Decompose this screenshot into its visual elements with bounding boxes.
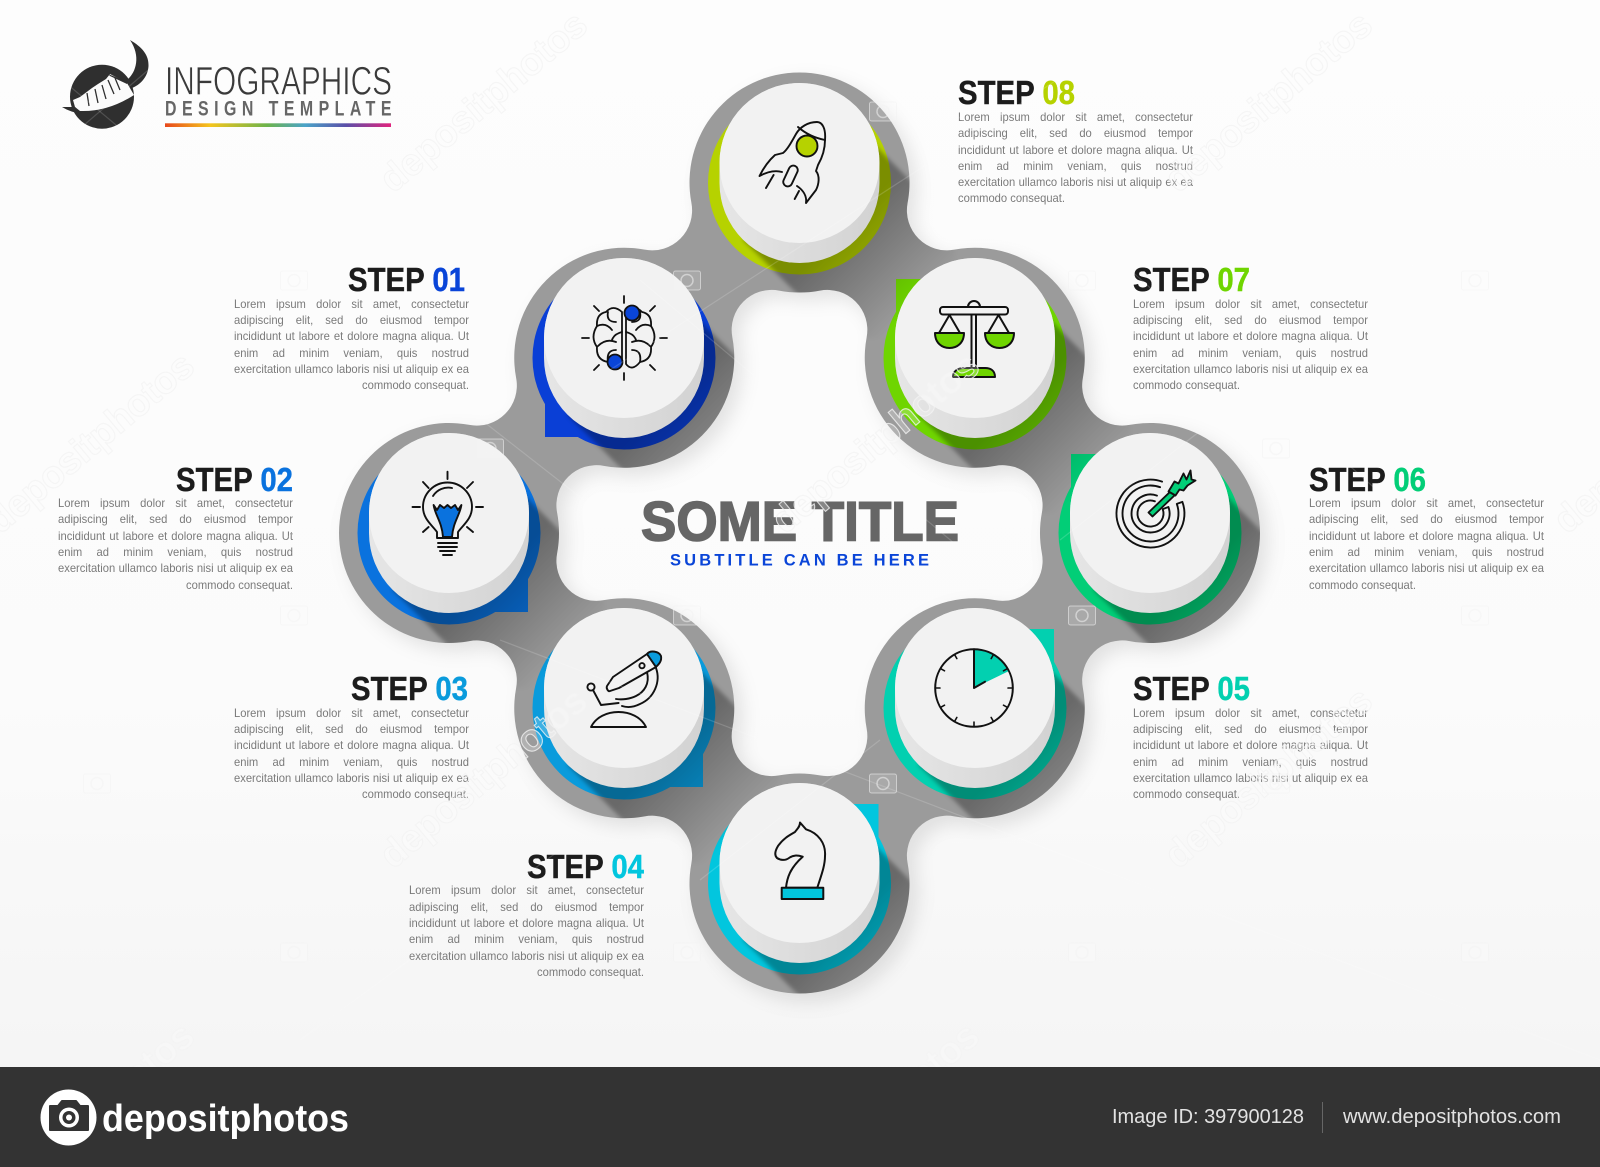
icon: brain: [582, 296, 667, 380]
text block: step 02: STEP 02: [176, 461, 293, 498]
text block: step 03: Lorem ipsum dolor sit amet, consectetur: [234, 706, 469, 720]
footer url: www.depositphotos.com: [1342, 1106, 1561, 1128]
text block: step 02: adipiscing elit, sed do eiusmod tempor: [58, 512, 293, 526]
text block: step 05: Lorem ipsum dolor sit amet, consectetur: [1133, 706, 1368, 720]
text block: step 04: adipiscing elit, sed do eiusmod tempor: [409, 900, 644, 914]
logo wordmark: INFOGRAPHICS: [165, 59, 392, 103]
text block: step 02: enim ad minim veniam, quis nostrud: [58, 545, 293, 559]
text block: step 05: exercitation ullamco laboris nisi ut aliquip ex ea: [1133, 771, 1368, 785]
coloured discs with square corners: [358, 92, 1242, 974]
text block: step 06: STEP 06: [1309, 461, 1426, 498]
text block: step 08: adipiscing elit, sed do eiusmod tempor: [958, 126, 1193, 140]
watermark overlay: depositphotos: [1157, 680, 1381, 877]
footer brand name: depositphotos: [102, 1098, 349, 1140]
text block: step 04: Lorem ipsum dolor sit amet, consectetur: [409, 883, 644, 897]
text block: step 06: commodo consequat.: [1309, 578, 1416, 592]
text block: step 04: enim ad minim veniam, quis nostrud: [409, 932, 644, 946]
text block: step 02: [58, 433, 527, 613]
text block: step 08: STEP 08: [958, 74, 1075, 111]
diagram: gray ring with step buttons: [62, 40, 1272, 1005]
text block: step 04: [409, 848, 644, 979]
text block: step 06: Lorem ipsum dolor sit amet, consectetur: [1309, 496, 1544, 510]
text block: step 03: STEP 03: [351, 670, 468, 707]
icon: scales: [935, 301, 1014, 377]
text block: step 01: enim ad minim veniam, quis nostrud: [234, 346, 469, 360]
text block: step 02: incididunt ut labore et dolore magna aliqua. Ut: [58, 529, 293, 543]
gray ring: [339, 73, 1260, 993]
icon: rocket: [760, 122, 825, 203]
text block: step 08: Lorem ipsum dolor sit amet, consectetur: [958, 110, 1193, 124]
icon: light bulb: [412, 472, 483, 555]
text block: step 03: adipiscing elit, sed do eiusmod tempor: [234, 722, 469, 736]
icon: clock: [935, 649, 1013, 727]
soft shadow under ring: [347, 81, 1268, 1001]
text block: step 07: adipiscing elit, sed do eiusmod tempor: [1133, 313, 1368, 327]
text block: step 05: incididunt ut labore et dolore magna aliqua. Ut: [1133, 738, 1368, 752]
text block: step 01: adipiscing elit, sed do eiusmod tempor: [234, 313, 469, 327]
text block: step 08: [958, 74, 1193, 205]
button 05: [895, 608, 1055, 788]
text block: step 05: adipiscing elit, sed do eiusmod tempor: [1133, 722, 1368, 736]
text block: step 08: incididunt ut labore et dolore magna aliqua. Ut: [958, 143, 1193, 157]
text block: step 06: exercitation ullamco laboris nisi ut aliquip ex ea: [1309, 561, 1544, 575]
text block: step 01: exercitation ullamco laboris nisi ut aliquip ex ea: [234, 362, 469, 376]
text block: step 03: [234, 670, 469, 801]
text block: step 04: incididunt ut labore et dolore magna aliqua. Ut: [409, 916, 644, 930]
text block: step 03: commodo consequat.: [362, 787, 469, 801]
text block: step 07: commodo consequat.: [1133, 378, 1240, 392]
text block: step 02: exercitation ullamco laboris nisi ut aliquip ex ea: [58, 561, 293, 575]
footer bar: [0, 1067, 1600, 1167]
text block: step 04: exercitation ullamco laboris nisi ut aliquip ex ea: [409, 949, 644, 963]
text block: step 04: commodo consequat.: [537, 965, 644, 979]
button 07: [895, 258, 1055, 438]
text block: step 07: exercitation ullamco laboris nisi ut aliquip ex ea: [1133, 362, 1368, 376]
text block: step 06: incididunt ut labore et dolore magna aliqua. Ut: [1309, 529, 1544, 543]
text block: step 05: commodo consequat.: [1133, 787, 1240, 801]
logo icon: [62, 40, 149, 129]
text block: step 07: Lorem ipsum dolor sit amet, consectetur: [1133, 297, 1368, 311]
text block: step 05: STEP 05: [1133, 670, 1250, 707]
text block: step 03: exercitation ullamco laboris nisi ut aliquip ex ea: [234, 771, 469, 785]
text block: step 07: enim ad minim veniam, quis nostrud: [1133, 346, 1368, 360]
long shadows: [391, 144, 1260, 994]
text block: step 03: enim ad minim veniam, quis nostrud: [234, 755, 469, 769]
watermark overlay: depositphotos: [764, 345, 988, 542]
watermark overlay: depositphotos: [1157, 4, 1381, 201]
text block: step 01: [234, 261, 469, 392]
text block: step 05: [1133, 670, 1368, 801]
text block: step 07: [1133, 261, 1368, 392]
button 03: [544, 608, 704, 788]
text block: step 03: incididunt ut labore et dolore magna aliqua. Ut: [234, 738, 469, 752]
button 06: [1070, 433, 1230, 613]
text block: step 01: incididunt ut labore et dolore magna aliqua. Ut: [234, 329, 469, 343]
text block: step 02: commodo consequat.: [186, 578, 293, 592]
text block: step 07: incididunt ut labore et dolore magna aliqua. Ut: [1133, 329, 1368, 343]
icon: target: [1116, 470, 1196, 548]
button 04: [720, 783, 880, 963]
text block: step 04: STEP 04: [527, 848, 644, 885]
text block: step 08: exercitation ullamco laboris nisi ut aliquip ex ea: [958, 175, 1193, 189]
footer logo icon: camera: [40, 1090, 96, 1146]
button 08: [720, 83, 880, 263]
text block: step 01: commodo consequat.: [362, 378, 469, 392]
watermark overlay: depositphotos: [372, 680, 596, 877]
text block: step 06: adipiscing elit, sed do eiusmod tempor: [1309, 512, 1544, 526]
icon: knight: [775, 822, 825, 899]
button 01: [544, 258, 704, 438]
logo wordmark: DESIGN TEMPLATE: [165, 97, 391, 121]
text block: step 08: enim ad minim veniam, quis nostrud: [958, 159, 1193, 173]
footer image id: Image ID: 397900128: [1112, 1106, 1304, 1128]
logo wordmark: [165, 59, 392, 121]
icon: microscope: [587, 652, 661, 727]
watermark overlay: depositphotos: [372, 4, 596, 201]
center title: SOME TITLE: [641, 490, 959, 553]
text block: step 02: Lorem ipsum dolor sit amet, consectetur: [58, 496, 293, 510]
text block: step 08: commodo consequat.: [958, 191, 1065, 205]
text block: step 05: enim ad minim veniam, quis nostrud: [1133, 755, 1368, 769]
button 02: [369, 433, 529, 613]
logo rainbow bar: [165, 123, 391, 127]
text block: step 01: Lorem ipsum dolor sit amet, consectetur: [234, 297, 469, 311]
text block: step 01: STEP 01: [348, 261, 465, 298]
text block: step 06: [1072, 447, 1544, 599]
center subtitle: SUBTITLE CAN BE HERE: [670, 552, 929, 570]
text block: step 07: STEP 07: [1133, 261, 1250, 298]
text block: step 06: enim ad minim veniam, quis nostrud: [1309, 545, 1544, 559]
